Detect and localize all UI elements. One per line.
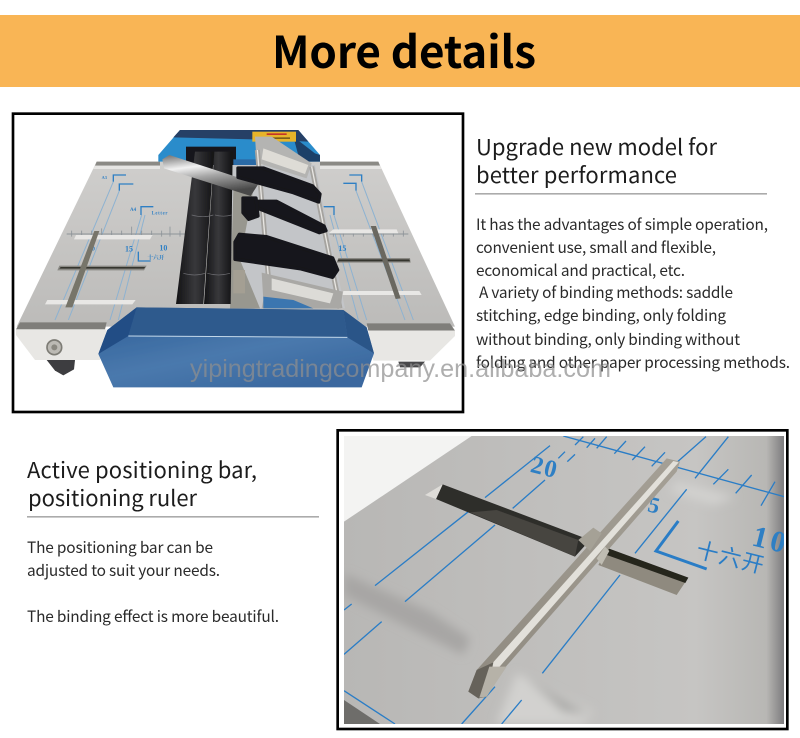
heading: positioning bar: positioning ruler — [28, 481, 197, 513]
text block: advantages: folding and other paper processing methods. — [476, 351, 790, 373]
text block: advantages: economical and practical, etc. — [476, 259, 685, 281]
header banner — [0, 15, 800, 87]
text block: advantages: stitching, edge binding, only folding — [476, 304, 726, 326]
steel handle — [162, 155, 258, 196]
machine table: 15 — [125, 245, 133, 254]
blue ruler lines — [344, 436, 784, 724]
printed labels: 20 — [528, 451, 561, 484]
positioning slots and bars — [74, 235, 153, 239]
black rubber rollers — [176, 152, 233, 304]
machine table — [16, 162, 455, 375]
raised panel shading — [344, 482, 735, 724]
machine table: A3 — [102, 175, 108, 180]
text block: advantages: It has the advantages of simple operation, — [476, 213, 768, 235]
text block: positioning bar: The positioning bar can be — [27, 536, 213, 558]
machine table: Letter — [152, 211, 168, 216]
heading: upgrade model: better performance — [476, 158, 677, 190]
slot — [436, 484, 590, 557]
machine table: 15 — [338, 244, 346, 253]
text block: positioning bar — [27, 536, 279, 627]
machine table: 0 — [92, 246, 96, 253]
table guide lines — [55, 175, 413, 320]
white background corner — [344, 436, 472, 522]
corner mark — [656, 521, 707, 569]
black clamps — [235, 168, 338, 277]
front blue cover — [98, 307, 374, 387]
text block: positioning bar: The binding effect is more beautiful. — [27, 605, 279, 627]
photo: positioning bar close-up — [338, 430, 793, 729]
machine table: A4 — [130, 208, 137, 213]
heading: upgrade model: Upgrade new model for — [476, 130, 717, 162]
photo: positioning bar close-up: 10 — [749, 520, 793, 561]
text block: advantages: convenient use, small and flexible, — [476, 236, 716, 258]
metal brackets and rods — [255, 137, 343, 308]
photo: positioning bar close-up: 十六开 — [693, 532, 769, 580]
rear blue housing — [158, 130, 320, 165]
machine table: 十六开 — [147, 253, 165, 261]
title: More details — [272, 17, 536, 81]
heading: positioning bar — [27, 453, 257, 513]
centre metal mechanism — [230, 165, 345, 308]
sliding positioning bar — [468, 458, 680, 698]
lower-left ruler patch — [344, 700, 380, 724]
photo: binding machine overview — [13, 114, 463, 412]
machine table: 10 — [159, 244, 167, 253]
text block: advantages: A variety of binding methods: saddle — [479, 281, 733, 303]
text block: positioning bar: adjusted to suit your needs. — [27, 559, 220, 581]
heading: upgrade model — [476, 130, 717, 190]
machine table: 0 — [380, 246, 384, 253]
text block: advantages: without binding, only binding without — [476, 328, 740, 350]
text block: advantages — [476, 213, 790, 373]
watermark: yipingtradingcompany.en.alibaba.com — [190, 355, 611, 383]
photo: positioning bar close-up: 5 — [645, 492, 662, 519]
heading: positioning bar: Active positioning bar, — [27, 453, 257, 485]
